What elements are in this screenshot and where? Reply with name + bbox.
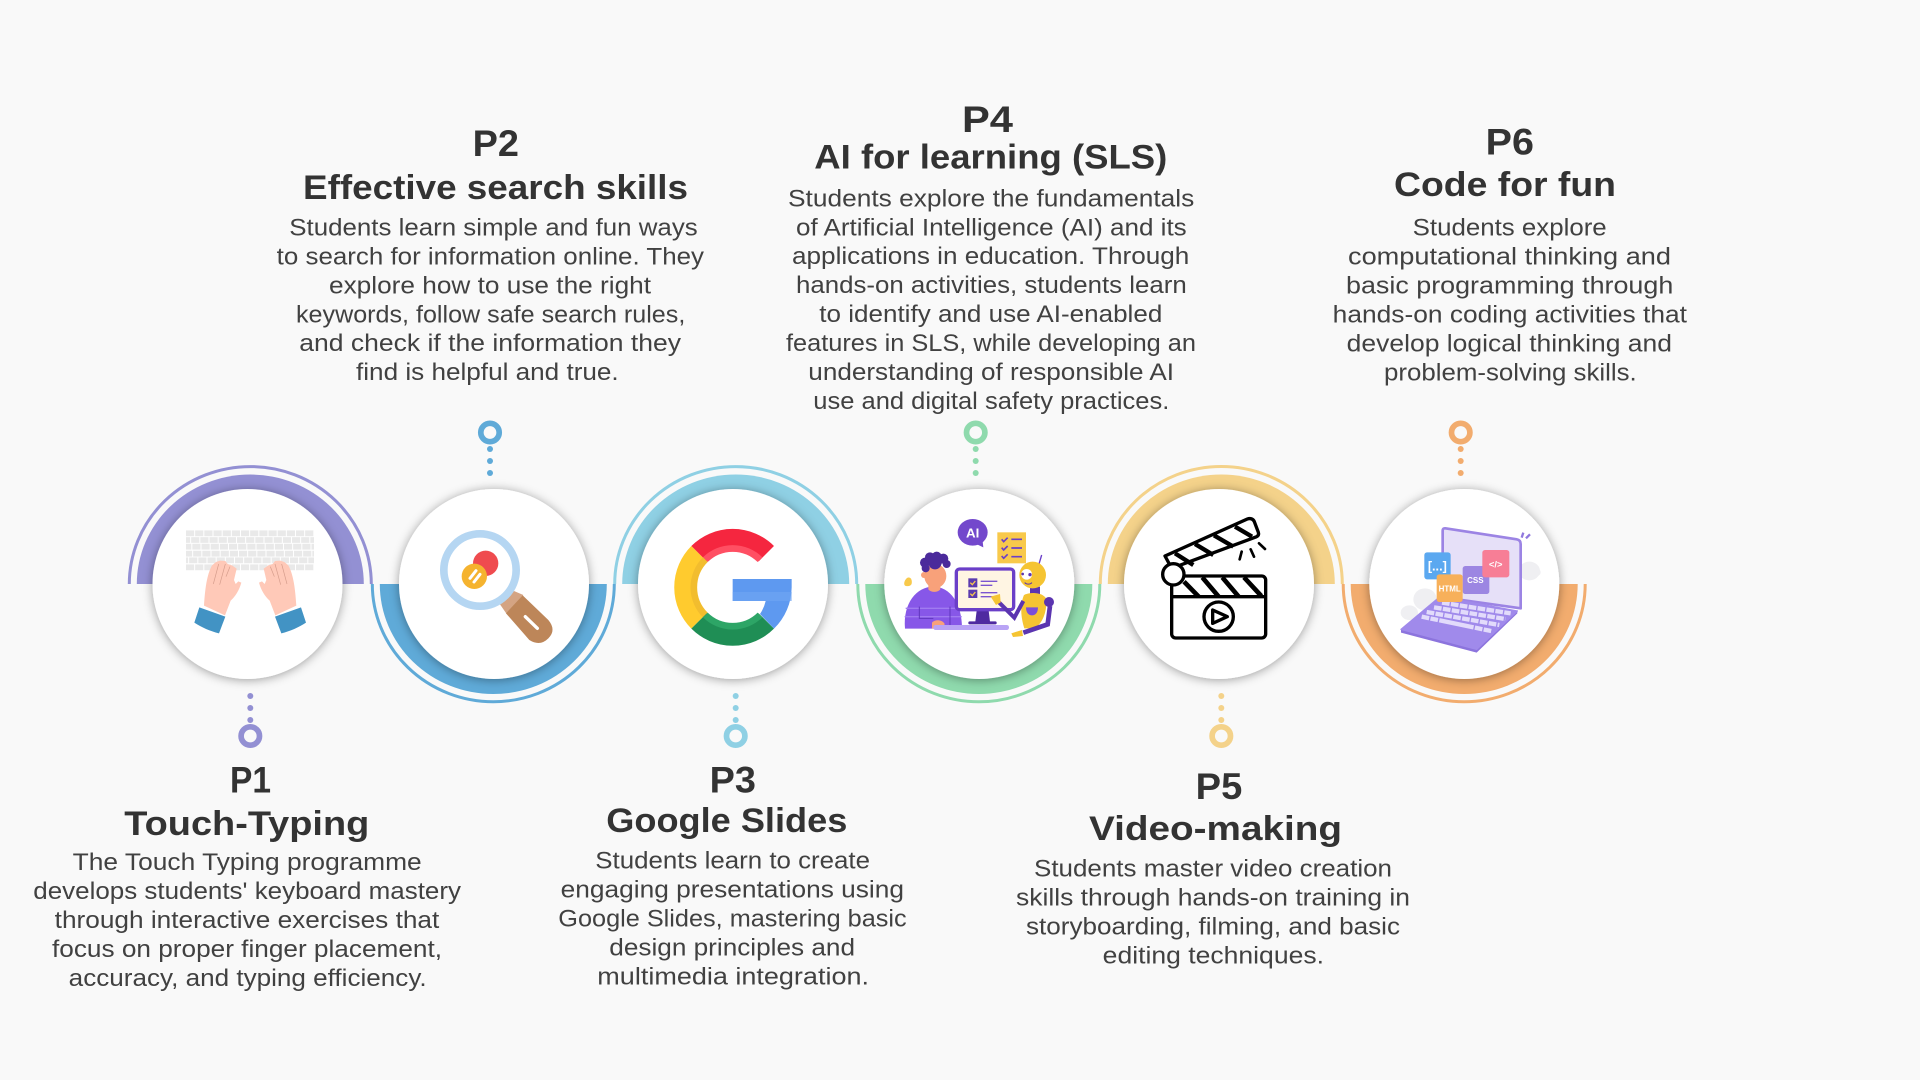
yellow upper arc band (1108, 474, 1335, 584)
text block: P6 Code for fun: problem-solving skills. (1384, 359, 1637, 386)
step 5 node: Video-making (1100, 466, 1342, 745)
text block: P2 Effective search skills (277, 123, 704, 386)
text block: P3 Google Slides: design principles and (609, 934, 855, 961)
student (904, 552, 962, 629)
text block: P4 AI for learning (SLS): AI for learning (SLS) (814, 138, 1167, 176)
text block: P1 Touch-Typing: develops students' keyboard mastery (33, 878, 461, 905)
text block: P4 AI for learning (SLS): features in SLS, while developing an (786, 330, 1196, 357)
yellow outer arc line (1100, 466, 1342, 584)
text block: P1 Touch-Typing: The Touch Typing programme (73, 849, 422, 876)
step 2 node: Effective search skills (372, 423, 614, 702)
green lower arc band (865, 584, 1092, 694)
text block: P6 Code for fun: hands-on coding activities that (1333, 301, 1687, 328)
blue lower arc band (380, 584, 607, 694)
icon: student and robot at a monitor (904, 519, 1054, 637)
code cards: CSS (1467, 576, 1484, 585)
text block: P5 Video-making: editing techniques. (1103, 942, 1324, 969)
blue outer arc line (372, 584, 614, 702)
icon: clapperboard (1163, 519, 1266, 638)
text block: P4 AI for learning (SLS): use and digital safety practices. (813, 388, 1169, 415)
text block: P5 Video-making (1016, 766, 1410, 969)
text block: P1 Touch-Typing: through interactive exercises that (55, 907, 440, 934)
text block: P2 Effective search skills: explore how to use the right (329, 272, 651, 300)
icon: magnifying glass (444, 534, 552, 643)
purple outer arc line (129, 467, 371, 584)
orange lower arc band (1351, 584, 1578, 694)
light blue upper arc band (622, 474, 849, 584)
white circle (152, 489, 342, 679)
speech bubble AI: AI (966, 525, 979, 540)
text block: P5 Video-making: P5 (1196, 766, 1242, 807)
text block: P2 Effective search skills: P2 (473, 123, 519, 164)
text block: P4 AI for learning (SLS): of Artificial Intelligence (AI) and its (796, 214, 1187, 242)
connector: dots and ring (726, 693, 745, 745)
text block: P4 AI for learning (SLS) (786, 99, 1196, 415)
connector: ring and dots (966, 423, 985, 476)
text block: P4 AI for learning (SLS): hands-on activities, students learn (796, 272, 1187, 299)
white circle (399, 489, 589, 679)
orange outer arc line (1343, 584, 1585, 702)
code cards: [...] (1428, 560, 1447, 574)
purple upper arc band (137, 475, 364, 584)
text block: P1 Touch-Typing: P1 (230, 760, 271, 801)
text block: P4 AI for learning (SLS): to identify and use AI-enabled (819, 301, 1162, 328)
right hand (259, 561, 306, 633)
speech bubble AI (958, 519, 988, 547)
connector: ring and dots (481, 423, 499, 476)
text block: P1 Touch-Typing: accuracy, and typing efficiency. (69, 965, 427, 992)
text block: P6 Code for fun: P6 (1486, 121, 1534, 162)
white circle (884, 489, 1074, 679)
text block: P2 Effective search skills: Students learn simple and fun ways (289, 214, 698, 242)
text block: P3 Google Slides: Google Slides, mastering basic (558, 905, 907, 932)
text block: P2 Effective search skills: and check if the information they (299, 330, 681, 357)
clouds (1401, 562, 1541, 620)
monitor (933, 569, 1014, 630)
icon: laptop with code cards (1401, 528, 1541, 653)
icon: hands on keyboard (186, 533, 314, 633)
white circle (638, 489, 828, 679)
light blue outer arc line (615, 467, 857, 584)
code cards (1424, 550, 1509, 602)
text block: P6 Code for fun: Students explore (1413, 214, 1607, 241)
text block: P5 Video-making: Video-making (1089, 810, 1342, 848)
text block: P4 AI for learning (SLS): P4 (962, 99, 1013, 140)
keyboard (186, 533, 314, 567)
text block: P2 Effective search skills: Effective search skills (303, 169, 688, 207)
text block: P6 Code for fun: develop logical thinking and (1347, 330, 1672, 357)
text block: P3 Google Slides: Google Slides (606, 802, 847, 840)
text block: P3 Google Slides (558, 760, 907, 990)
text block: P3 Google Slides: Students learn to create (595, 847, 870, 874)
white circle (1369, 489, 1559, 679)
robot (991, 555, 1054, 637)
text block: P6 Code for fun: basic programming through (1346, 272, 1673, 299)
step 4 node: AI for learning (858, 423, 1100, 702)
text block: P6 Code for fun: Code for fun (1394, 166, 1616, 204)
connector: dots and ring (1212, 693, 1231, 745)
text block: P5 Video-making: skills through hands-on training in (1016, 884, 1410, 911)
text block: P6 Code for fun (1333, 121, 1687, 386)
step 3 node: Google Slides (615, 467, 857, 745)
text block: P3 Google Slides: multimedia integration. (597, 963, 869, 990)
white circle (1124, 489, 1314, 679)
icon: Google G (685, 540, 792, 635)
step 1 node: Touch-Typing (129, 467, 371, 745)
text block: P4 AI for learning (SLS): Students explore the fundamentals (788, 186, 1194, 212)
text block: P4 AI for learning (SLS): applications in education. Through (792, 243, 1189, 270)
text block: P3 Google Slides: P3 (710, 760, 756, 801)
text block: P5 Video-making: storyboarding, filming, and basic (1026, 913, 1400, 940)
text block: P4 AI for learning (SLS): understanding of responsible AI (808, 359, 1174, 386)
text block: P1 Touch-Typing: Touch-Typing (124, 805, 369, 843)
connector: dots and ring (241, 693, 260, 745)
text block: P1 Touch-Typing (33, 760, 461, 992)
green outer arc line (858, 584, 1100, 702)
text block: P6 Code for fun: computational thinking and (1348, 243, 1671, 270)
code cards: HTML (1439, 584, 1461, 593)
text block: P1 Touch-Typing: focus on proper finger placement, (52, 936, 442, 963)
code cards: </> (1489, 559, 1503, 569)
step 6 node: Code for fun (1343, 423, 1585, 702)
connector: ring and dots (1452, 423, 1470, 476)
text block: P3 Google Slides: engaging presentations using (561, 876, 904, 903)
checklist (997, 532, 1026, 563)
text block: P2 Effective search skills: to search for information online. They (277, 244, 704, 270)
text block: P2 Effective search skills: find is helpful and true. (356, 359, 619, 386)
text block: P5 Video-making: Students master video creation (1034, 855, 1392, 882)
laptop (1401, 528, 1530, 653)
text block: P2 Effective search skills: keywords, follow safe search rules, (296, 302, 685, 328)
left hand (194, 561, 241, 633)
